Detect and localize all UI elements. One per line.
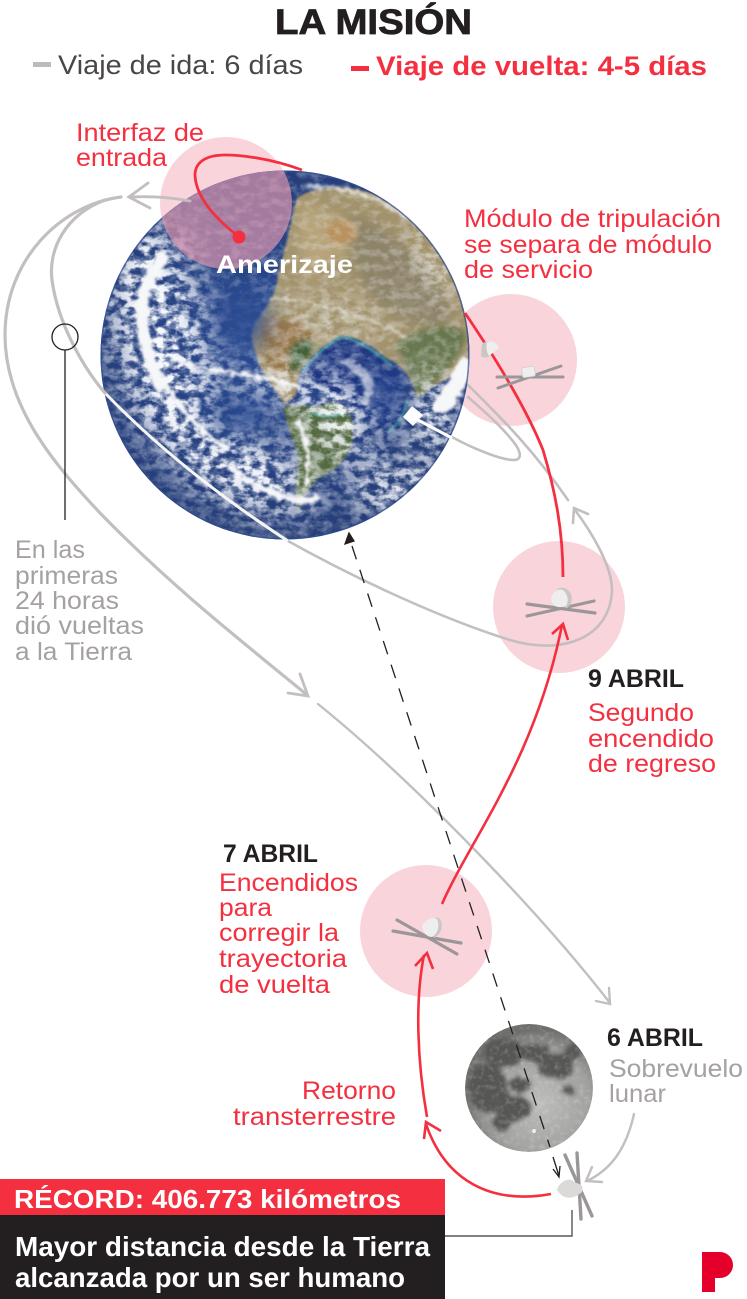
label: 9 April: encendido bbox=[588, 725, 714, 753]
label: 7 April bbox=[219, 840, 358, 999]
pink circle: second return burn bbox=[493, 541, 625, 673]
label: entry interface: Interfaz de bbox=[76, 119, 204, 147]
label: 7 April: Encendidos bbox=[219, 869, 358, 897]
arrowhead: bottom bbox=[553, 1157, 560, 1177]
publisher logo bbox=[702, 1252, 733, 1292]
spacecraft at correction burn bbox=[393, 918, 461, 954]
label: entry interface: entrada bbox=[76, 144, 167, 172]
label: 7 April: 7 ABRIL bbox=[223, 840, 318, 868]
land: southern continent bbox=[283, 402, 353, 512]
outbound orbit arcs bbox=[5, 197, 308, 696]
legend: return trip: Viaje de vuelta: 4-5 días bbox=[376, 51, 707, 81]
label: 7 April: para bbox=[219, 894, 272, 922]
label: 7 April: de vuelta bbox=[219, 971, 330, 999]
label: transearth return bbox=[233, 1077, 396, 1131]
label: transearth return: transterrestre bbox=[233, 1103, 396, 1131]
noise clouds: dense layer bbox=[100, 211, 466, 538]
spacecraft at separation: service module bbox=[497, 366, 563, 388]
title: LA MISIÓN bbox=[275, 2, 472, 42]
translunar path with arrow bbox=[318, 704, 610, 1004]
label: first 24 hours: primeras bbox=[15, 562, 118, 590]
label: first 24 hours: dió vueltas bbox=[15, 612, 144, 640]
record heading bbox=[0, 1179, 445, 1215]
record description: alcanzada por un ser humano bbox=[15, 1262, 405, 1293]
label: 6 April: 6 ABRIL bbox=[607, 1024, 703, 1052]
record description bbox=[0, 1215, 445, 1299]
pink overlay on Earth bbox=[162, 170, 292, 269]
record description: Mayor distancia desde la Tierra bbox=[15, 1231, 430, 1262]
label: 9 April: Segundo bbox=[588, 699, 694, 727]
legend: outbound trip: Viaje de ida: 6 días bbox=[58, 50, 303, 80]
red path: from second burn to separation bbox=[465, 313, 563, 577]
planet Earth bbox=[100, 170, 470, 540]
spacecraft at Moon bbox=[557, 1153, 592, 1219]
label: 6 April: lunar bbox=[609, 1080, 666, 1108]
label: entry interface bbox=[76, 119, 204, 172]
splashdown point bbox=[232, 230, 246, 244]
label: 7 April: corregir la bbox=[219, 919, 339, 947]
red path: from correction burn to second burn bbox=[442, 624, 568, 904]
pink circle: crew module separation bbox=[445, 294, 577, 426]
moon bbox=[465, 1024, 593, 1152]
crew module marker: white diamond with line bbox=[403, 406, 452, 438]
clear ocean patches bbox=[212, 288, 401, 433]
gray arrow: lunar flyby pointer bbox=[586, 1114, 634, 1182]
gulf: deep water bbox=[303, 340, 404, 432]
label: first 24 hours: a la Tierra bbox=[15, 638, 132, 666]
noise clouds: thin layer bbox=[100, 170, 470, 540]
red path: re-entry curve bbox=[195, 155, 302, 237]
record box bbox=[0, 1179, 445, 1299]
record heading: RÉCORD: 406.773 kilómetros bbox=[14, 1184, 401, 1214]
label: first 24 hours bbox=[15, 536, 144, 666]
label: 9 April: 9 ABRIL bbox=[588, 665, 684, 693]
orbit loops near Earth and second burn bbox=[288, 385, 612, 646]
spacecraft at separation: capsule bbox=[481, 341, 499, 358]
label: module separation: se separa de módulo bbox=[464, 231, 712, 259]
cloud bands bbox=[142, 186, 464, 500]
label: module separation: Módulo de tripulación bbox=[464, 205, 721, 233]
label: 9 April bbox=[588, 665, 716, 778]
land: interior tones bbox=[291, 204, 350, 277]
red path: transearth injection up bbox=[415, 953, 433, 1117]
marker circle and leader bbox=[52, 324, 78, 520]
dashed distance line bbox=[345, 533, 560, 1177]
label: 6 April bbox=[607, 1024, 743, 1108]
limb shading bbox=[101, 171, 469, 539]
orbit crossing in front of Earth bbox=[105, 393, 288, 541]
label: transearth return: Retorno bbox=[302, 1077, 396, 1105]
gray return path with arrow to entry interface bbox=[129, 183, 190, 208]
leader from record box to spacecraft bbox=[445, 1210, 572, 1236]
land: upper continent bbox=[252, 187, 469, 405]
pink circle: entry interface bbox=[160, 137, 292, 269]
spacecraft at second burn bbox=[527, 588, 595, 616]
label: splashdown: Amerizaje bbox=[216, 251, 353, 279]
label: 6 April: Sobrevuelo bbox=[609, 1055, 743, 1083]
red path: around the Moon bbox=[424, 1122, 551, 1197]
label: first 24 hours: 24 horas bbox=[15, 587, 119, 615]
label: 9 April: de regreso bbox=[588, 750, 716, 778]
pink circle: trajectory correction burns bbox=[360, 865, 492, 997]
label: first 24 hours: En las bbox=[15, 536, 85, 564]
arrowhead: top bbox=[345, 533, 354, 544]
label: module separation bbox=[464, 205, 721, 284]
label: 7 April: trayectoria bbox=[219, 945, 347, 973]
label: module separation: de servicio bbox=[464, 256, 593, 284]
